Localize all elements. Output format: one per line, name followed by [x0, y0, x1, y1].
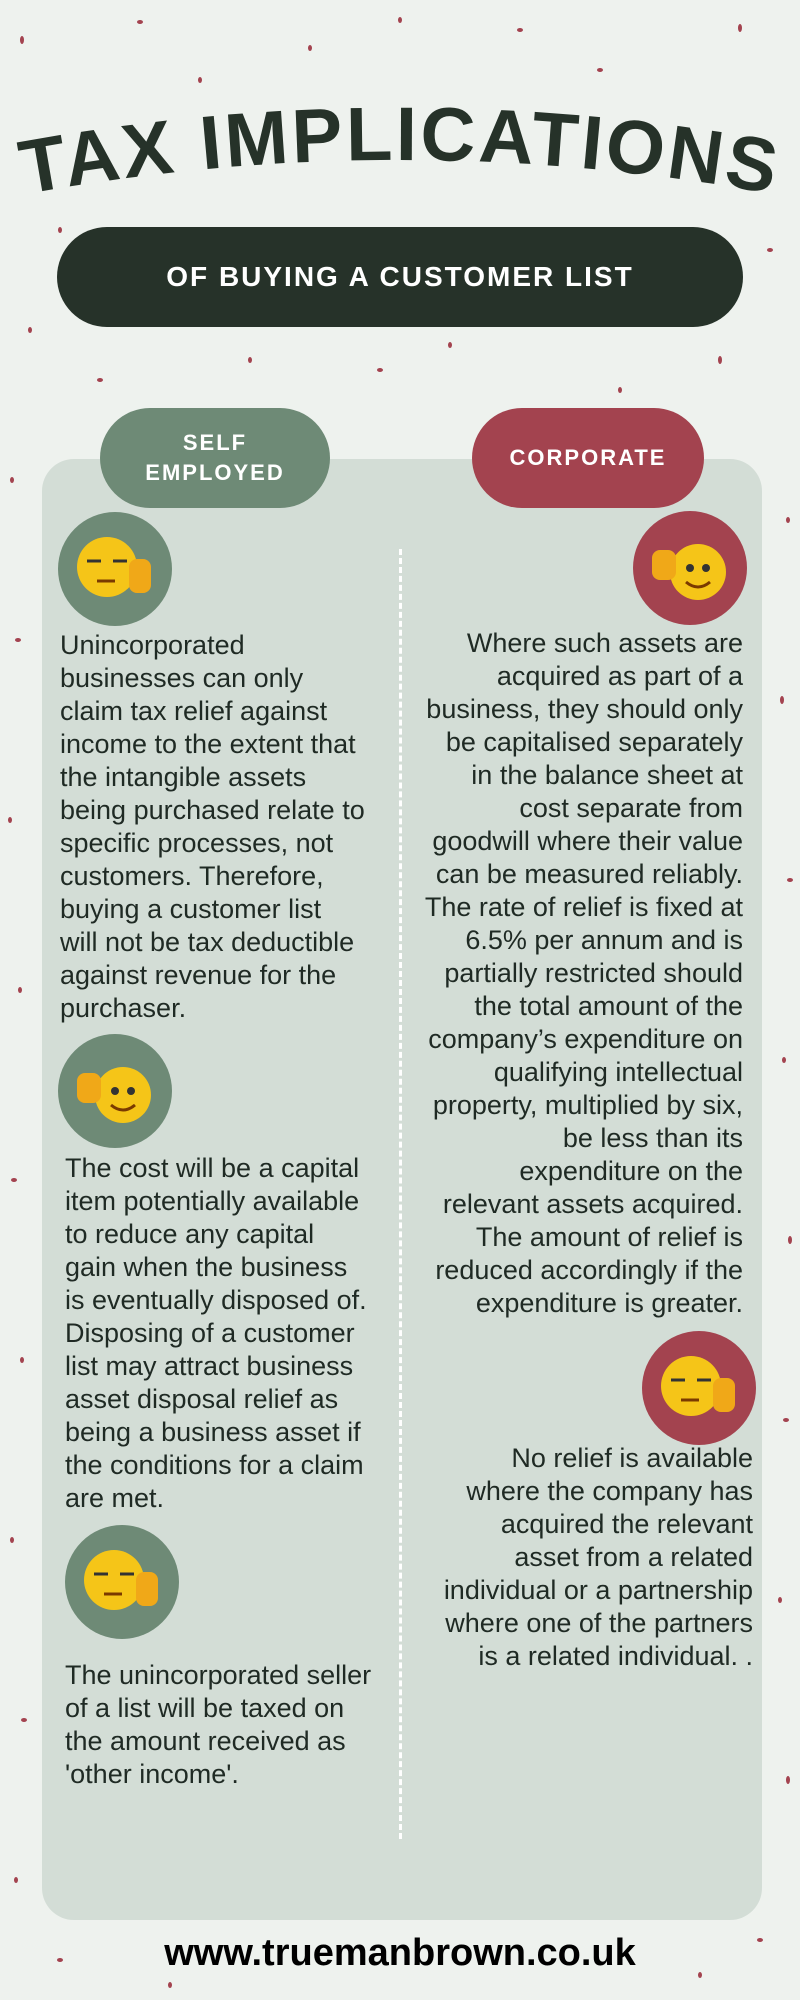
icon: thumbs down right 2 [642, 1331, 756, 1445]
text: left 2 [65, 1153, 367, 1513]
text: left 1: Unincorporated [60, 630, 245, 660]
icon: thumbs up right 1 [633, 511, 747, 625]
text: left 1: claim tax relief against [60, 696, 327, 726]
text: left 2: list may attract business [65, 1351, 353, 1381]
divider [399, 549, 402, 1839]
text: left 2: asset disposal relief as [65, 1384, 338, 1414]
heading: self employed: EMPLOYED [145, 460, 285, 485]
subtitle pill: OF BUYING A CUSTOMER LIST [166, 261, 634, 292]
text: left 1 [60, 630, 365, 1023]
text: right 2: No relief is available [511, 1443, 753, 1473]
text: right 1 [425, 628, 743, 1318]
text: right 1: cost separate from [519, 793, 743, 823]
text: right 1: expenditure is greater. [476, 1288, 743, 1318]
text: right 1: business, they should only [426, 694, 743, 724]
icon: thumbs down left 3 [65, 1525, 179, 1639]
text: left 2: The cost will be a capital [65, 1153, 359, 1183]
text: right 1: be capitalised separately [446, 727, 743, 757]
text: left 1: will not be tax deductible [60, 927, 354, 957]
text: left 2: Disposing of a customer [65, 1318, 355, 1348]
text: right 1: relevant assets acquired. [443, 1189, 743, 1219]
title: TAX IMPLICATIONS [16, 108, 775, 192]
text: right 1: goodwill where their value [432, 826, 743, 856]
text: left 2: being a business asset if [65, 1417, 361, 1447]
text: right 1: reduced accordingly if the [435, 1255, 743, 1285]
icon: thumbs down left 1 [58, 512, 172, 626]
text: right 2: acquired the relevant [501, 1509, 753, 1539]
text: left 1: the intangible assets [60, 762, 306, 792]
text: right 2: asset from a related [514, 1542, 753, 1572]
text: right 2: individual or a partnership [444, 1575, 753, 1605]
text: left 2: are met. [65, 1483, 164, 1513]
text: left 2: is eventually disposed of. [65, 1285, 367, 1315]
text: right 1: be less than its [563, 1123, 743, 1153]
text: right 1: expenditure on the [519, 1156, 743, 1186]
text: left 1: customers. Therefore, [60, 861, 324, 891]
text: right 1: company’s expenditure on [428, 1024, 743, 1054]
heading: corporate: CORPORATE [510, 445, 666, 470]
text: left 2: to reduce any capital [65, 1219, 314, 1249]
text: right 2: where the company has [466, 1476, 753, 1506]
text: right 1: The rate of relief is fixed at [425, 892, 743, 922]
text: left 3: The unincorporated seller [65, 1660, 371, 1690]
panel [42, 459, 762, 1920]
text: right 2: where one of the partners [445, 1608, 753, 1638]
text: right 1: partially restricted should [444, 958, 743, 988]
text: left 1: being purchased relate to [60, 795, 365, 825]
text: left 2: gain when the business [65, 1252, 347, 1282]
heading: corporate [472, 408, 704, 508]
subtitle pill [57, 227, 743, 327]
text: left 1: purchaser. [60, 993, 186, 1023]
text: right 1: in the balance sheet at [471, 760, 743, 790]
text: right 1: acquired as part of a [497, 661, 743, 691]
text: right 1: The amount of relief is [476, 1222, 743, 1252]
text: right 2 [444, 1443, 753, 1671]
text: right 1: 6.5% per annum and is [465, 925, 743, 955]
text: left 3: the amount received as [65, 1726, 346, 1756]
text: left 3: 'other income'. [65, 1759, 239, 1789]
text: right 2: is a related individual. . [478, 1641, 753, 1671]
text: left 3: of a list will be taxed on [65, 1693, 344, 1723]
text: left 2: item potentially available [65, 1186, 359, 1216]
footer url: www.truemanbrown.co.uk [164, 1932, 636, 1974]
text: right 1: qualifying intellectual [494, 1057, 743, 1087]
heading: self employed: SELF [183, 430, 247, 455]
icon: thumbs up left 2 [58, 1034, 172, 1148]
text: left 1: buying a customer list [60, 894, 321, 924]
text: right 1: the total amount of the [474, 991, 743, 1021]
text: left 1: against revenue for the [60, 960, 336, 990]
text: right 1: property, multiplied by six, [433, 1090, 743, 1120]
text: left 1: income to the extent that [60, 729, 356, 759]
text: left 3 [65, 1660, 371, 1789]
text: left 1: businesses can only [60, 663, 303, 693]
text: left 2: the conditions for a claim [65, 1450, 364, 1480]
text: right 1: can be measured reliably. [436, 859, 743, 889]
heading: self employed [100, 408, 330, 508]
text: left 1: specific processes, not [60, 828, 333, 858]
text: right 1: Where such assets are [467, 628, 743, 658]
